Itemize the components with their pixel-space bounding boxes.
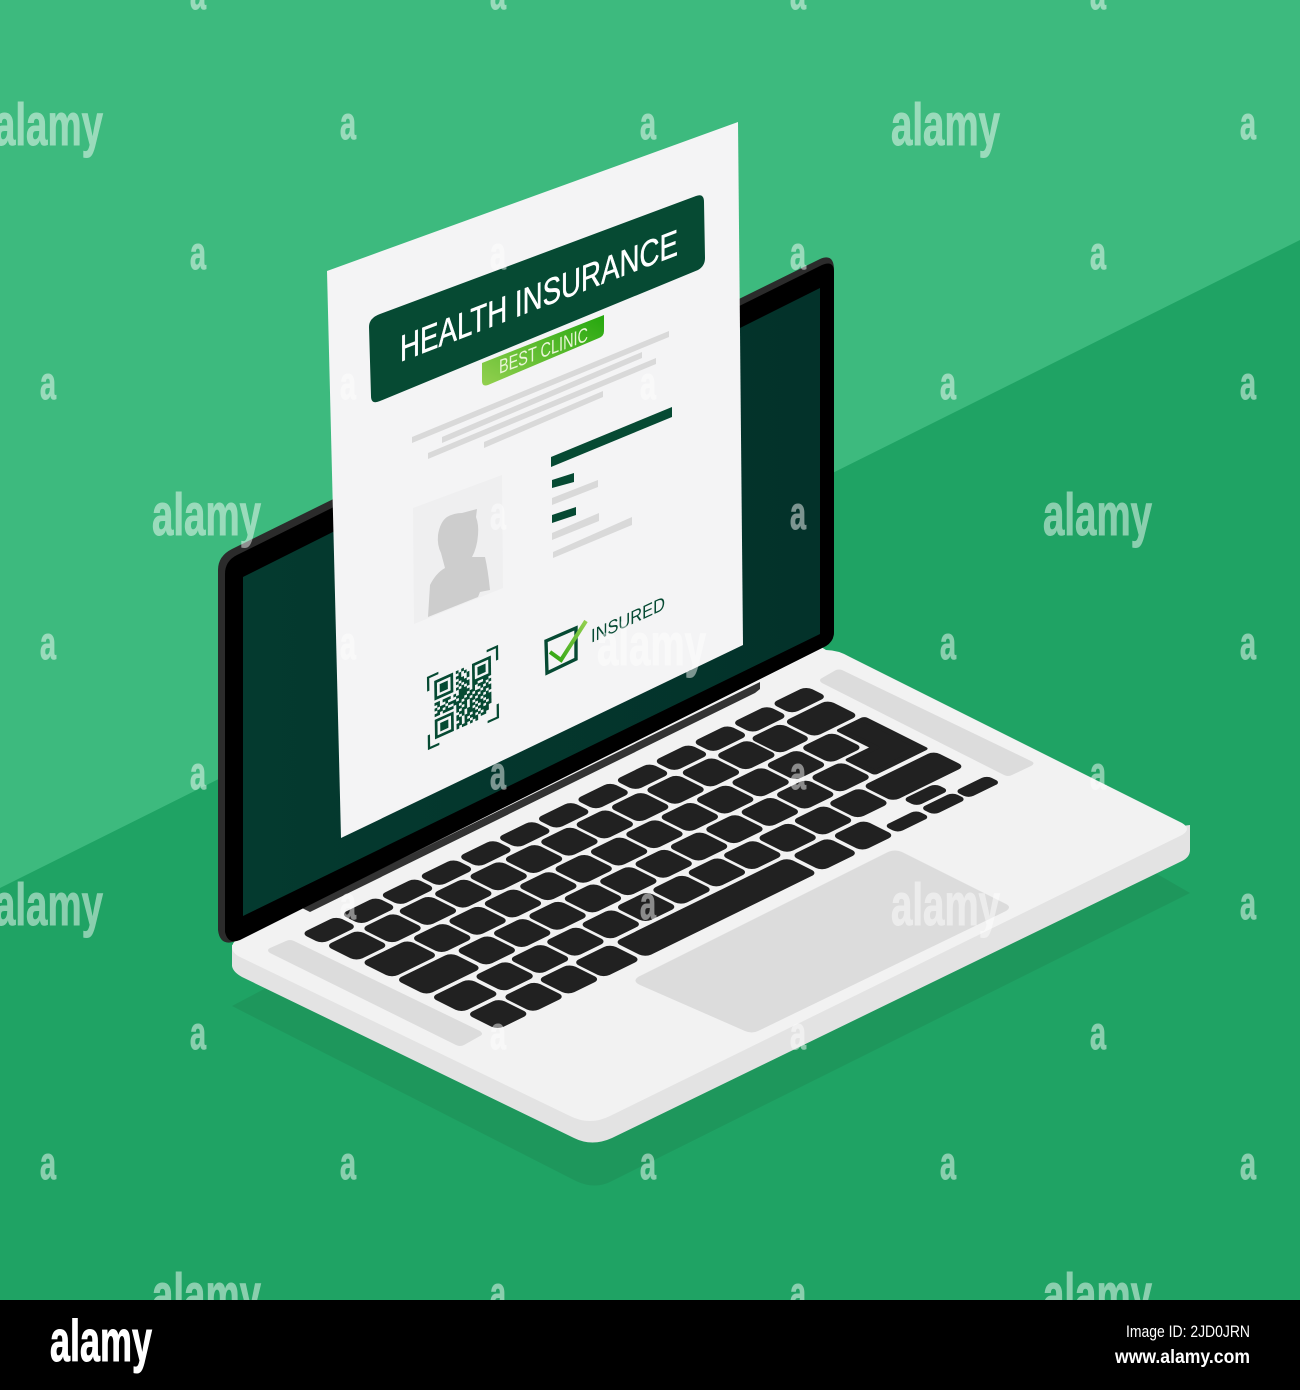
header bar — [369, 195, 705, 402]
small watermark letters: a — [940, 357, 956, 409]
laptop lid bezel — [225, 264, 834, 941]
laptop — [218, 257, 1190, 1185]
large watermark words: alamy — [597, 612, 706, 678]
photo background — [413, 475, 503, 624]
small watermark letters: a — [490, 1007, 506, 1059]
small watermark letters: a — [790, 1007, 806, 1059]
small watermark letters: a — [790, 1267, 806, 1319]
keyboard — [301, 686, 1002, 1031]
function key row — [301, 686, 827, 944]
laptop base top surface — [232, 640, 1187, 1121]
intro text lines — [412, 331, 669, 459]
small watermark letters: a — [190, 747, 206, 799]
small watermark letters: a — [640, 1137, 656, 1189]
small watermark letters: a — [340, 877, 356, 929]
small watermark letters: a — [790, 747, 806, 799]
green tab — [482, 315, 604, 386]
background: darker green floor — [0, 240, 1300, 1300]
small watermark letters: a — [190, 1007, 206, 1059]
small watermark letters: a — [1240, 357, 1256, 409]
small watermark letters: a — [1090, 1007, 1106, 1059]
laptop lid frame — [218, 257, 834, 943]
small watermark letters: a — [640, 97, 656, 149]
small watermark letters: a — [1240, 97, 1256, 149]
insured checkbox — [546, 621, 586, 673]
footer logo: alamy — [50, 1309, 152, 1374]
document page — [327, 122, 743, 838]
third key row — [396, 762, 872, 995]
small watermark letters: a — [490, 747, 506, 799]
large watermark words: alamy — [1043, 482, 1152, 548]
photo placeholder — [413, 475, 503, 624]
small watermark letters: a — [790, 487, 806, 539]
large watermark words — [0, 92, 1152, 1328]
small watermark letters: a — [640, 877, 656, 929]
large watermark words: alamy — [891, 92, 1000, 158]
small watermark letters: a — [40, 1137, 56, 1189]
hinge strip — [302, 682, 760, 912]
insurance document — [327, 122, 743, 838]
arrow keys — [866, 767, 1001, 833]
check mark — [550, 621, 586, 660]
qr brackets — [428, 647, 498, 748]
website: www.alamy.com — [1114, 1347, 1250, 1368]
small watermark letters: a — [340, 617, 356, 669]
trackpad — [635, 850, 1009, 1032]
small watermark letters: a — [340, 1137, 356, 1189]
small watermark letters: a — [40, 617, 56, 669]
small watermark letters: a — [340, 357, 356, 409]
label: best clinic: BEST CLINIC — [499, 323, 588, 379]
image id: Image ID: 2JD0JRN — [1126, 1322, 1250, 1341]
small watermark letters: a — [1090, 747, 1106, 799]
small watermark letters: a — [1240, 1137, 1256, 1189]
footer background — [0, 1300, 1300, 1390]
small watermark letters: a — [490, 1267, 506, 1319]
heading: health insurance: HEALTH INSURANCE — [400, 222, 678, 371]
speaker strip left — [268, 940, 482, 1046]
speaker strip right — [820, 670, 1034, 776]
large watermark words: alamy — [891, 872, 1000, 938]
number key row — [325, 700, 859, 961]
label: insured: INSURED — [591, 593, 665, 648]
footer bar — [0, 1300, 1300, 1390]
laptop base side edge — [232, 825, 1190, 1142]
qr code — [428, 647, 498, 748]
small watermark letters: a — [940, 1137, 956, 1189]
small watermark letters: a — [640, 357, 656, 409]
large watermark words: alamy — [152, 1262, 261, 1328]
details: heading bar and fields — [551, 407, 672, 558]
qr modules — [434, 657, 492, 738]
person silhouette — [428, 509, 490, 617]
small watermark letters: a — [1090, 227, 1106, 279]
small watermark letters: a — [490, 227, 506, 279]
small watermark letters: a — [940, 617, 956, 669]
bottom key row with space bar — [467, 820, 895, 1030]
laptop screen — [243, 288, 820, 916]
small watermark letters: a — [190, 227, 206, 279]
small watermark letters: a — [1240, 617, 1256, 669]
fourth key row — [430, 751, 965, 1013]
large watermark words: alamy — [152, 482, 261, 548]
second key row — [361, 732, 863, 978]
small watermark letters: a — [40, 357, 56, 409]
enter key — [816, 719, 923, 772]
laptop shadow — [232, 870, 1190, 1186]
small watermark letters: a — [340, 97, 356, 149]
small watermark letters: a — [490, 487, 506, 539]
small watermark letters: a — [790, 227, 806, 279]
small watermark letters: a — [1240, 877, 1256, 929]
check box — [546, 628, 576, 673]
large watermark words: alamy — [1043, 1262, 1152, 1328]
